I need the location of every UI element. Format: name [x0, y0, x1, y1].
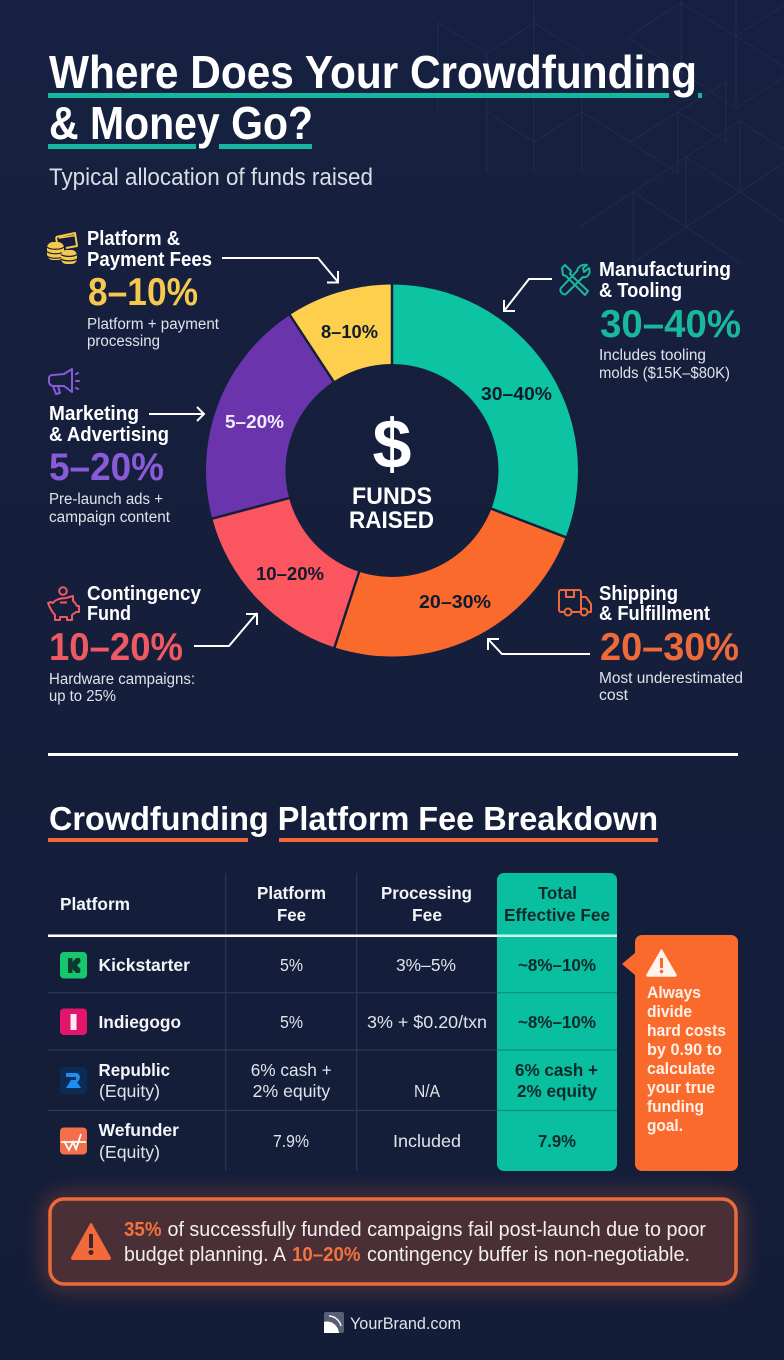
- segment labels: 5–20%: [225, 412, 284, 432]
- warning banner: budget planning. A: [124, 1244, 287, 1266]
- icon: tools: [560, 265, 590, 295]
- center label: $: [373, 405, 411, 483]
- highlighted column: total effective fee: [497, 873, 617, 1171]
- title: [48, 46, 702, 149]
- callout: marketing: & Advertising: [49, 424, 169, 446]
- row: republic: N/A: [414, 1081, 440, 1101]
- callout: shipping: Most underestimated: [599, 670, 743, 687]
- logo: wefunder: [60, 1128, 87, 1154]
- logo: republic: [60, 1067, 87, 1094]
- row: wefunder: Included: [393, 1131, 461, 1151]
- callout: shipping: 20–30%: [600, 626, 739, 669]
- segment: platform fees: [290, 284, 392, 382]
- row: kickstarter: [60, 952, 596, 978]
- callout: contingency: Fund: [87, 603, 131, 625]
- row: wefunder: 7.9%: [273, 1131, 309, 1151]
- arrow: manufacturing: [504, 279, 552, 311]
- row: republic: 6% cash +: [515, 1060, 598, 1080]
- tip callout: [622, 935, 738, 1171]
- fee table: [48, 873, 617, 1171]
- center label: RAISED: [349, 507, 434, 534]
- segment labels: 10–20%: [256, 564, 324, 584]
- warning banner: [50, 1199, 736, 1284]
- segment: marketing: [206, 315, 334, 519]
- warning banner: contingency buffer is non-negotiable.: [367, 1244, 690, 1266]
- row: kickstarter: Kickstarter: [98, 955, 190, 975]
- warning banner: 10–20%: [292, 1244, 361, 1266]
- row: republic: [60, 1060, 598, 1101]
- callout: marketing: [49, 369, 171, 526]
- callout: platform fees: processing: [87, 333, 160, 350]
- row: republic: 2% equity: [517, 1081, 597, 1101]
- callout: contingency: up to 25%: [49, 688, 116, 705]
- tip callout: calculate: [647, 1060, 715, 1078]
- callout: shipping: Shipping: [599, 583, 678, 605]
- footer brand: [324, 1312, 461, 1333]
- callout: platform fees: Platform + payment: [87, 316, 220, 333]
- callout: manufacturing: Manufacturing: [599, 259, 731, 281]
- table header: Platform: [257, 883, 326, 903]
- segment: contingency: [212, 498, 359, 647]
- callout: platform fees: Payment Fees: [87, 249, 212, 271]
- segment labels: 8–10%: [321, 322, 378, 342]
- subtitle: Typical allocation of funds raised: [49, 164, 373, 191]
- row: indiegogo: Indiegogo: [98, 1012, 181, 1032]
- center label: FUNDS: [352, 483, 432, 510]
- callout: manufacturing: molds ($15K–$80K): [599, 365, 730, 382]
- arrow: marketing: [149, 407, 204, 421]
- callout: contingency: Contingency: [87, 583, 202, 605]
- tip callout: divide: [647, 1003, 692, 1021]
- table header: [60, 883, 610, 925]
- logo: kickstarter: [60, 952, 87, 978]
- tip callout: by 0.90 to: [647, 1041, 722, 1059]
- tip callout: your true: [647, 1079, 715, 1097]
- tip callout: goal.: [647, 1117, 683, 1135]
- logo: indiegogo: [60, 1008, 87, 1035]
- table header: Fee: [277, 905, 306, 925]
- table header: Total: [538, 883, 577, 903]
- callout: marketing: campaign content: [49, 509, 171, 526]
- table header: Effective Fee: [504, 905, 610, 925]
- row: wefunder: Wefunder: [98, 1120, 179, 1140]
- callout: manufacturing: 30–40%: [600, 303, 741, 346]
- row: indiegogo: 3% + $0.20/txn: [367, 1012, 487, 1032]
- callout: platform fees: Platform &: [87, 228, 180, 250]
- warning banner: 35%: [124, 1219, 162, 1241]
- callout: marketing: 5–20%: [49, 446, 164, 489]
- row: republic: (Equity): [99, 1081, 160, 1101]
- warning banner: of successfully funded campaigns fail post-launch due to poor: [168, 1219, 706, 1241]
- tip callout: Always: [647, 984, 701, 1002]
- arrow: contingency: [194, 613, 257, 646]
- title: & Money Go?: [49, 97, 313, 149]
- icon: piggy bank: [48, 587, 79, 620]
- arrow: shipping: [488, 639, 590, 654]
- tip callout: funding: [647, 1098, 704, 1116]
- callout: shipping: [559, 583, 743, 704]
- callout: marketing: Marketing: [49, 403, 139, 425]
- table header: Fee: [412, 905, 442, 925]
- icon: coins and card: [47, 233, 77, 264]
- row: wefunder: [60, 1120, 576, 1162]
- segment: manufacturing: [392, 284, 578, 537]
- callout: shipping: & Fulfillment: [599, 603, 710, 625]
- callout: contingency: Hardware campaigns:: [49, 671, 195, 688]
- footer brand: YourBrand.com: [350, 1315, 461, 1333]
- segment labels: [225, 322, 552, 612]
- icon: megaphone: [49, 369, 79, 394]
- icon: truck: [559, 590, 591, 616]
- donut chart: [206, 282, 578, 657]
- callout: shipping: cost: [599, 687, 629, 704]
- callout: platform fees: [47, 228, 220, 350]
- row: kickstarter: 3%–5%: [396, 955, 456, 975]
- row: wefunder: 7.9%: [538, 1131, 576, 1151]
- callout: contingency: [48, 583, 202, 705]
- callout: platform fees: 8–10%: [88, 271, 198, 314]
- section heading: fee breakdown: Crowdfunding Platform Fee Breakdown: [49, 800, 658, 837]
- row: republic: 2% equity: [253, 1081, 330, 1101]
- row: kickstarter: ~8%–10%: [518, 955, 596, 975]
- icon: warning triangle: [72, 1224, 110, 1259]
- callout: manufacturing: Includes tooling: [599, 347, 706, 364]
- callout: manufacturing: & Tooling: [599, 280, 682, 302]
- callout: contingency: 10–20%: [49, 626, 183, 669]
- arrow: platform fees: [222, 258, 338, 282]
- row: wefunder: (Equity): [99, 1142, 160, 1162]
- row: kickstarter: 5%: [280, 955, 303, 975]
- table header: Processing: [381, 883, 472, 903]
- center label: [349, 405, 434, 534]
- row: republic: 6% cash +: [251, 1060, 332, 1080]
- segment labels: 20–30%: [419, 592, 491, 612]
- icon: warning: [647, 950, 676, 976]
- row: indiegogo: 5%: [280, 1012, 303, 1032]
- segment labels: 30–40%: [481, 384, 552, 404]
- callout: manufacturing: [560, 259, 741, 382]
- title: Where Does Your Crowdfunding: [49, 46, 697, 98]
- tip callout: hard costs: [647, 1022, 726, 1040]
- icon: brand logo: [324, 1312, 344, 1333]
- row: indiegogo: [60, 1008, 596, 1035]
- callout: marketing: Pre-launch ads +: [49, 491, 163, 508]
- table header: Platform: [60, 894, 130, 914]
- row: indiegogo: ~8%–10%: [518, 1012, 596, 1032]
- segment: shipping: [334, 509, 566, 657]
- row: republic: Republic: [98, 1060, 170, 1080]
